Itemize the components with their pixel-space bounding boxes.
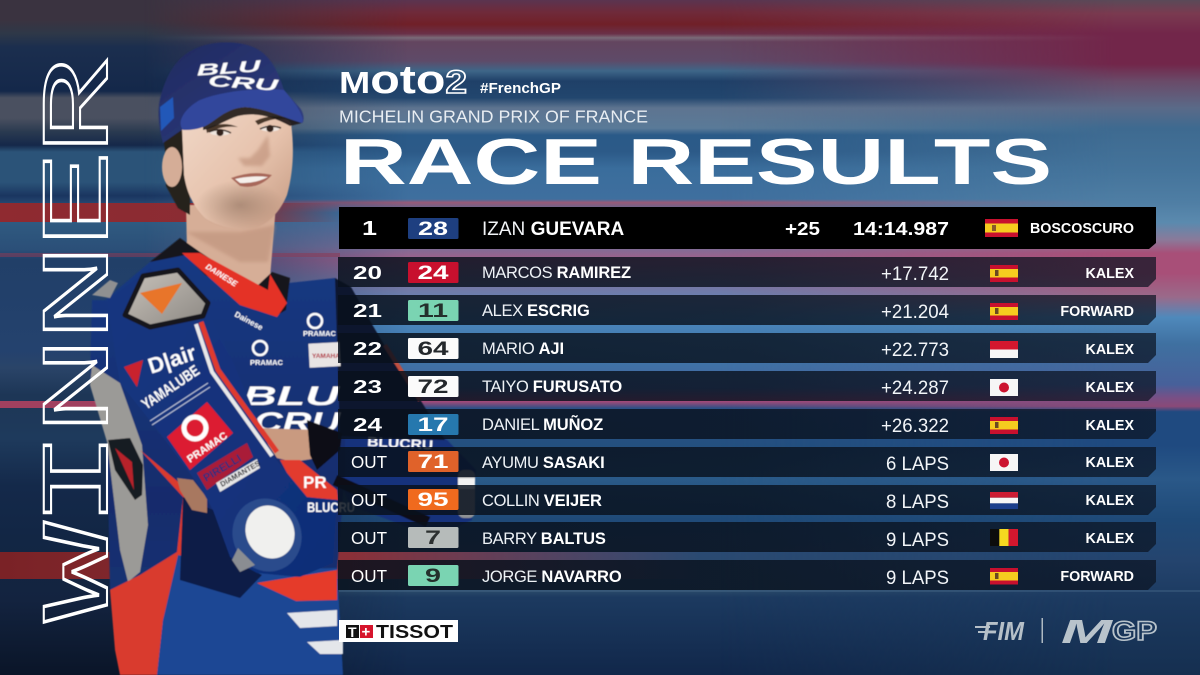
row: 20 Ramirez: 20 (353, 263, 382, 283)
row: OUT Baltus: 7 (425, 528, 441, 549)
row: OUT Navarro: FORWARD (1060, 569, 1134, 585)
logo: MotoGP: M (1061, 613, 1115, 650)
hair (163, 122, 190, 215)
row: OUT Sasaki: 6 LAPS (886, 454, 949, 475)
arm stripe (196, 324, 272, 456)
row: winner Guevara: 1 (362, 218, 377, 240)
row: 21 Escrig: ALEX ESCRIG (482, 302, 590, 320)
nose shading (238, 135, 270, 166)
shadow under forearm (180, 497, 262, 598)
left arm sleeve (107, 268, 337, 577)
row: OUT Baltus (338, 522, 1156, 552)
row: 22 Aji (338, 333, 1156, 363)
row: OUT Veijer: 8 LAPS (886, 492, 949, 513)
divider (1042, 618, 1043, 643)
row: 22 Aji: 64 (418, 339, 449, 360)
shoulder pad (125, 270, 208, 327)
row: winner Guevara (339, 207, 1156, 249)
row: 21 Escrig (338, 295, 1156, 325)
row: OUT Navarro: JORGE NAVARRO (482, 568, 622, 586)
lower suit (157, 555, 343, 675)
row: 24 Muñoz: KALEX (1086, 418, 1134, 434)
rider portrait: winner Izan Guevara: PRAMAC (185, 430, 230, 465)
row: OUT Navarro (338, 560, 1156, 590)
row: 21 Escrig: +21.204 (881, 302, 949, 323)
row: OUT Baltus: BARRY BALTUS (482, 530, 606, 548)
rider portrait: winner Izan Guevara: PRAMAC (303, 329, 336, 338)
row: OUT Veijer: OUT (351, 490, 387, 510)
hashtag: #FrenchGP (480, 81, 561, 97)
row: 24 Muñoz: 24 (353, 415, 382, 435)
row: 23 Furusato (338, 371, 1156, 401)
rider portrait: winner Izan Guevara: PIRELLI (201, 453, 244, 485)
sponsor logo: Tissot (339, 620, 458, 642)
arm logos (124, 360, 143, 387)
row: 24 Muñoz: 17 (418, 415, 448, 436)
row: 20 Ramirez: +17.742 (881, 264, 949, 285)
row: winner Guevara: BOSCOSCURO (1030, 221, 1134, 237)
pramac patch (167, 402, 233, 470)
neck (186, 205, 276, 292)
eyebrows and eyes (206, 124, 238, 133)
row: OUT Navarro: OUT (351, 566, 387, 586)
row: OUT Sasaki (338, 447, 1156, 477)
glove and bare forearm (257, 428, 318, 462)
logo: MotoGP: GP (1112, 616, 1157, 646)
cap logo (196, 57, 280, 100)
row: winner Guevara: +25 (785, 219, 820, 239)
row: 20 Ramirez: KALEX (1086, 266, 1134, 282)
rider torso (90, 240, 345, 675)
subtitle: MICHELIN GRAND PRIX OF FRANCE (339, 106, 648, 126)
logo: MotoGP (1061, 613, 1157, 650)
rider right arm (335, 424, 476, 532)
elbow puck (221, 487, 313, 583)
right arm details: BLUCRU (367, 434, 434, 452)
red side panel (110, 450, 200, 675)
rider portrait: winner Izan Guevara: PRAMAC (250, 358, 283, 367)
hand fingers (177, 478, 207, 513)
row: OUT Veijer: COLLIN VEIJER (482, 492, 602, 510)
row: 22 Aji: MARIO AJI (482, 340, 564, 358)
row: 24 Muñoz: DANIEL MUÑOZ (482, 414, 603, 434)
rider portrait: winner Izan Guevara: DAINESE (204, 262, 239, 289)
row: 20 Ramirez: 24 (418, 263, 449, 284)
row: OUT Sasaki: KALEX (1086, 455, 1134, 471)
cap brim (181, 89, 303, 130)
right arm details (335, 434, 475, 522)
row: 23 Furusato: TAIYO FURUSATO (482, 378, 622, 396)
rider portrait: winner Izan Guevara: PR (303, 473, 327, 492)
row: 20 Ramirez (338, 257, 1156, 287)
sponsor logo: Tissot: T (348, 624, 357, 640)
mouth (231, 173, 272, 187)
under-brim shadow (203, 107, 302, 130)
row: OUT Baltus: OUT (351, 528, 387, 548)
rider portrait: winner Izan Guevara (90, 42, 476, 675)
row: OUT Veijer: KALEX (1086, 493, 1134, 509)
face (182, 106, 293, 229)
row: OUT Veijer (338, 485, 1156, 515)
row: 21 Escrig: 21 (353, 301, 382, 321)
sponsor logo: Tissot: + (362, 624, 370, 640)
row: OUT Sasaki: 71 (418, 452, 449, 473)
row: 22 Aji: 22 (353, 339, 382, 359)
pirelli strip (197, 443, 253, 490)
logo: Moto2: Moto 2 (339, 58, 467, 102)
rider portrait: winner Izan Guevara: YAMALUBE (139, 362, 203, 413)
rider portrait: winner Izan Guevara: YAMAHA (312, 353, 340, 360)
row: OUT Baltus: 9 LAPS (886, 530, 949, 551)
rider portrait: winner Izan Guevara: CRU (254, 407, 342, 437)
vertical title: WINNER: WINNER (27, 59, 136, 622)
row: 24 Muñoz (338, 409, 1156, 439)
cap logo: CRU (207, 73, 279, 95)
side patch with red mark (108, 438, 143, 500)
row: 22 Aji: KALEX (1086, 342, 1134, 358)
row: 21 Escrig: FORWARD (1060, 304, 1134, 320)
chest logos: BLU (243, 381, 342, 411)
grey side mesh (90, 365, 148, 582)
row: 22 Aji: +22.773 (881, 340, 949, 361)
row: OUT Sasaki: OUT (351, 452, 387, 472)
results table (338, 207, 1156, 590)
top of side shoulder (92, 280, 118, 298)
row: 23 Furusato: 72 (418, 377, 448, 398)
diamantes strip (216, 459, 260, 492)
row: OUT Navarro: 9 (425, 566, 441, 587)
row: OUT Veijer: 95 (418, 490, 449, 511)
row: OUT Baltus: KALEX (1086, 531, 1134, 547)
rider portrait: winner Izan Guevara: DIAMANTES (218, 459, 262, 489)
row: OUT Sasaki: AYUMU SASAKI (482, 454, 605, 472)
row: 20 Ramirez: MARCOS RAMIREZ (482, 264, 631, 282)
ear (162, 147, 182, 187)
row: winner Guevara: 28 (418, 219, 448, 240)
row: 23 Furusato: KALEX (1086, 380, 1134, 396)
rider portrait: winner Izan Guevara: Dainese (233, 310, 265, 332)
row: winner Guevara: IZAN GUEVARA (482, 219, 624, 240)
dark side of rider's far shoulder (335, 278, 445, 440)
cap side patch (160, 97, 174, 131)
title: RACE RESULTS (340, 125, 1052, 198)
sponsor logo: Tissot: TISSOT (376, 622, 453, 642)
row: OUT Navarro: 9 LAPS (886, 568, 949, 589)
row: 24 Muñoz: +26.322 (881, 416, 949, 437)
rider portrait: winner Izan Guevara: BLUCRU (307, 499, 355, 515)
rider portrait: winner Izan Guevara: D|air (145, 340, 200, 379)
cap (159, 42, 304, 143)
logo: FIM: FIM (983, 616, 1025, 646)
cap logo: BLU (196, 58, 262, 80)
collar (150, 238, 290, 316)
row: 21 Escrig: 11 (418, 301, 449, 322)
row: winner Guevara: 14:14.987 (853, 219, 949, 239)
row: 23 Furusato: +24.287 (881, 378, 949, 399)
row: 23 Furusato: 23 (353, 377, 382, 397)
red and white hip stripes (257, 570, 337, 601)
